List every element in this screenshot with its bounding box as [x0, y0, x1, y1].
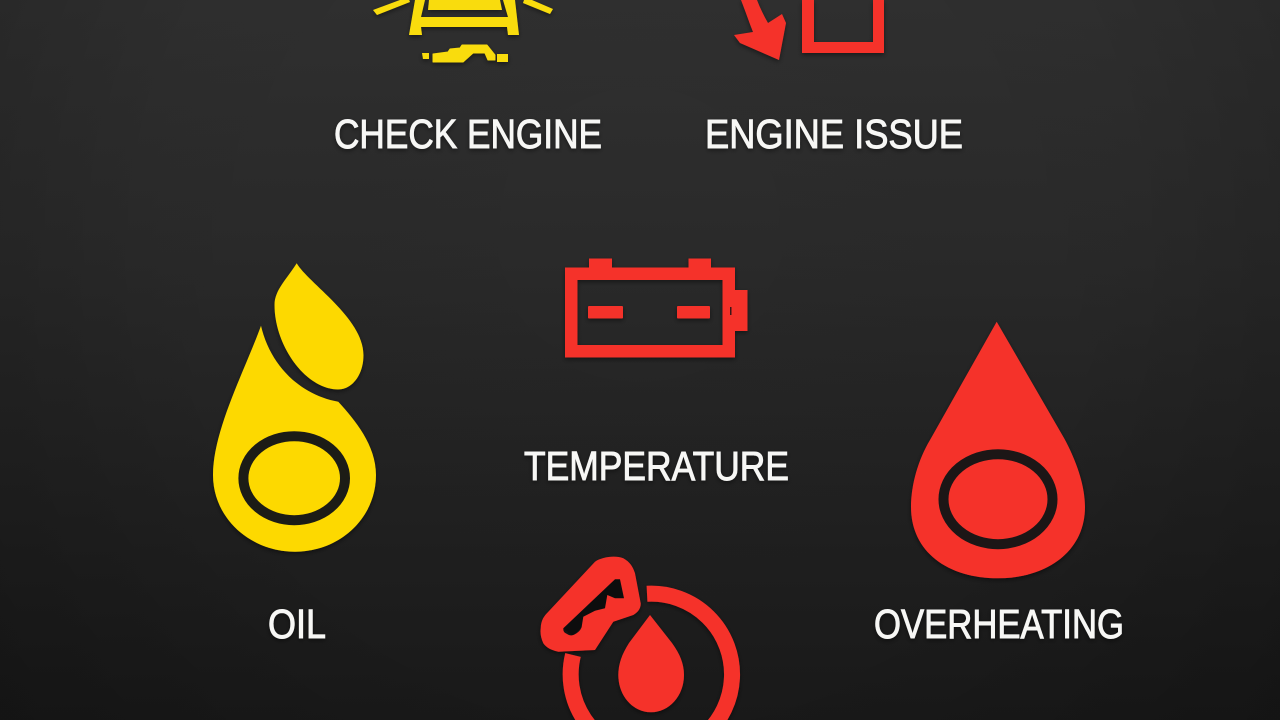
icon: oil pressure gauge [540, 557, 732, 720]
label: check engine: CHECK ENGINE [334, 111, 602, 157]
label: overheating: OVERHEATING [874, 601, 1124, 647]
label: engine issue: ENGINE ISSUE [705, 111, 963, 157]
label: temperature: TEMPERATURE [524, 443, 789, 489]
icon: check engine [373, 0, 553, 62]
icon: engine issue [734, 0, 884, 60]
icon: battery [565, 258, 748, 358]
icon: oil drops [213, 263, 376, 552]
icon: overheating drop [911, 322, 1085, 578]
label: oil: OIL [268, 601, 326, 647]
